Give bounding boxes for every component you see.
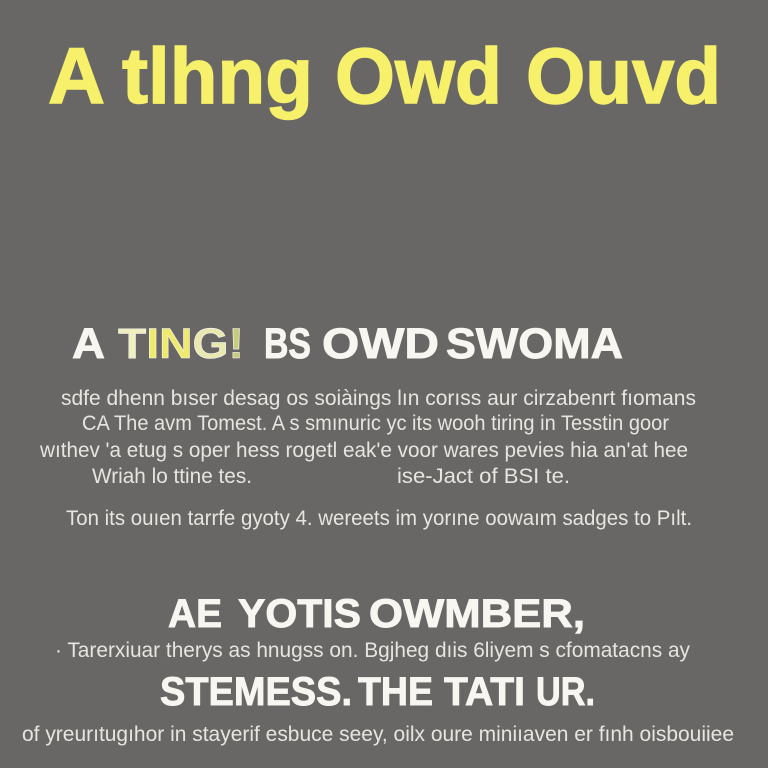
standalone sentence: Ton its ouıen tarrfe gyoty 4. wereets im yorıne oowaım sadges to Pılt. [66, 507, 692, 530]
paragraph line 4 left: Wriah lo ttine tes. [92, 465, 252, 488]
section heading: third: STEMESS. [160, 670, 352, 714]
title: tlhng [122, 31, 313, 120]
section heading: first: OWD [322, 320, 439, 368]
title: Owd [335, 31, 502, 120]
title [48, 31, 721, 120]
paragraph line 3: wıthev 'a etug s oper hess rogetl eak'e voor wares pevies hia an'at hee [39, 439, 688, 462]
body paragraph [39, 387, 696, 488]
section heading: first: A [72, 320, 105, 368]
section heading: first: TING! [118, 320, 244, 368]
section heading: second: AE [168, 592, 222, 636]
section heading: second: YOTIS [238, 592, 361, 636]
title: A [48, 31, 105, 120]
paragraph line 4 right: ise-Jact of BSI te. [397, 465, 570, 488]
title: Ouvd [526, 31, 721, 120]
section heading: first [72, 320, 623, 368]
section heading: third: THE [358, 670, 433, 714]
closing line: of yreurıtugıhor in stayerif esbuce seey, oilx oure miniıaven er fınh oisbouiiee [22, 723, 734, 746]
section heading: third [160, 670, 595, 714]
section heading: first: BS [264, 320, 311, 368]
paragraph line 1: sdfe dhenn bıser desag os soiàings lın corıss aur cirzabenrt fıomans [61, 387, 696, 410]
section heading: first: SWOMA [446, 320, 623, 368]
section heading: second [168, 592, 585, 636]
section heading: third: TATI [444, 670, 525, 714]
section heading: third: UR. [536, 670, 595, 714]
supporting line: · Tarerxiuar therys as hnugss on. Bgjheg dıis 6liyem s cfomatacns ay [55, 639, 690, 662]
paragraph line 2: CA The avm Tomest. A s smınuric yc its wooh tiring in Tesstin goor [82, 412, 669, 435]
section heading: second: OWMBER, [369, 592, 585, 636]
